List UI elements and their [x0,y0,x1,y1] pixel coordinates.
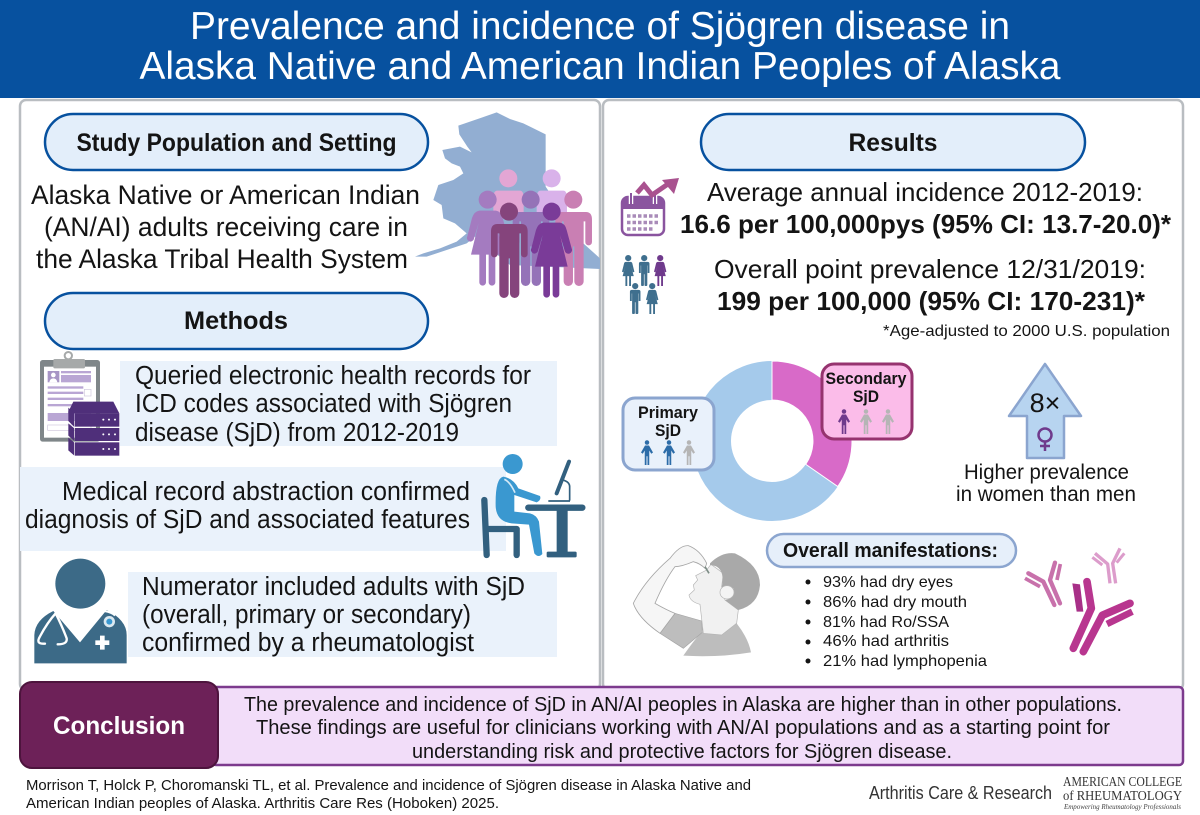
text block: study population: (AN/AI) adults receiving care in [44,212,408,242]
icon: doctor [34,559,127,663]
text block: higher prevalence [956,460,1136,506]
heading: results [701,114,1085,170]
conclusion text bar: understanding risk and protective factors for Sjögren disease. [412,741,952,763]
conclusion text bar: These findings are useful for clinicians working with AN/AI populations and as a starting point for [256,717,1110,739]
title banner: Alaska Native and American Indian Peoples of Alaska [140,45,1061,88]
text block: study population [31,180,420,274]
text block: study population: the Alaska Tribal Health System [36,244,408,274]
heading: study population and setting: Study Population and Setting [76,129,396,157]
panel: results [603,100,1183,690]
text block: incidence: Average annual incidence 2012-2019: [707,177,1143,207]
method step: queried records [120,361,557,447]
text block: incidence: 16.6 per 100,000pys (95% CI: 13.7-20.0)* [680,209,1172,239]
icon: person using eye drops [633,546,760,656]
panel: study population and methods [20,100,600,690]
list: manifestations: 21% had lymphopenia [823,653,987,670]
icon: map of Alaska [415,112,600,269]
callout: primary SjD: SjD [655,421,681,440]
citation: American Indian peoples of Alaska. Arthritis Care Res (Hoboken) 2025. [26,796,499,812]
method step: record abstraction: Medical record abstraction confirmed [62,478,470,506]
method step: queried records: disease (SjD) from 2012-2019 [135,419,459,447]
list: manifestations: 81% had Ro/SSA [823,614,949,631]
donut chart [712,361,852,502]
arrow: 8x higher in women [1009,364,1081,458]
conclusion label [20,682,218,768]
heading: overall manifestations: Overall manifestations: [783,540,998,562]
list: manifestations: 46% had arthritis [823,633,949,650]
citation: Morrison T, Holck P, Choromanski TL, et al. Prevalence and incidence of Sjögren disease in Alaska Native and [26,778,751,794]
text block: study population: Alaska Native or American Indian [31,180,420,210]
callout: secondary SjD [822,364,912,439]
callout: secondary SjD: Secondary [826,369,907,388]
list: manifestations [806,574,987,670]
method step: numerator: confirmed by a rheumatologist [142,629,474,657]
list: manifestations: 86% had dry mouth [823,594,967,611]
icon: antibodies [1025,548,1132,652]
heading: methods [45,293,428,349]
logo: American College of Rheumatology: AMERICAN COLLEGE [1063,774,1182,789]
method step: numerator [128,572,557,657]
logo: American College of Rheumatology: of RHEUMATOLOGY [1063,788,1182,803]
footnote: *Age-adjusted to 2000 U.S. population [883,323,1170,340]
logo: American College of Rheumatology [1063,774,1182,811]
conclusion label: Conclusion [53,712,185,740]
citation [26,778,751,812]
logo: American College of Rheumatology: Empowering Rheumatology Professionals [1063,802,1181,811]
list: manifestations: 93% had dry eyes [823,574,953,591]
text block: prevalence: 199 per 100,000 (95% CI: 170-231)* [717,286,1146,316]
heading: methods: Methods [184,307,288,335]
title banner [0,0,1200,98]
method step: queried records: ICD codes associated with Sjögren [135,390,512,418]
journal name: Arthritis Care & Research [869,783,1052,803]
conclusion text bar [212,687,1183,765]
icon: clipboard and server [40,352,119,456]
method step: numerator: Numerator included adults with SjD [142,573,525,601]
method step: record abstraction [20,467,506,551]
heading: overall manifestations [767,534,1016,567]
text block: prevalence [714,254,1146,316]
title banner: Prevalence and incidence of Sjögren disease in [190,5,1010,48]
heading: results: Results [848,129,938,157]
method step: record abstraction: diagnosis of SjD and associated features [25,506,470,534]
conclusion text bar: The prevalence and incidence of SjD in AN/AI peoples in Alaska are higher than in other populations. [244,694,1122,716]
text block: prevalence: Overall point prevalence 12/31/2019: [714,254,1146,284]
method step: numerator: (overall, primary or secondary) [142,601,471,629]
text block: incidence [680,177,1172,239]
icon: person at desk [484,454,582,557]
callout: primary SjD: Primary [638,403,699,422]
text block: higher prevalence: in women than men [956,482,1136,506]
text block: higher prevalence: Higher prevalence [964,460,1129,484]
heading: study population and setting [45,114,428,170]
callout: primary SjD [623,398,714,470]
callout: secondary SjD: SjD [853,387,879,406]
icon: calendar with rising arrow [622,178,679,235]
icon: group of people [467,169,592,298]
arrow: 8x higher in women: 8× [1030,388,1060,418]
method step: queried records: Queried electronic health records for [135,362,531,390]
icon: people group [622,255,666,314]
